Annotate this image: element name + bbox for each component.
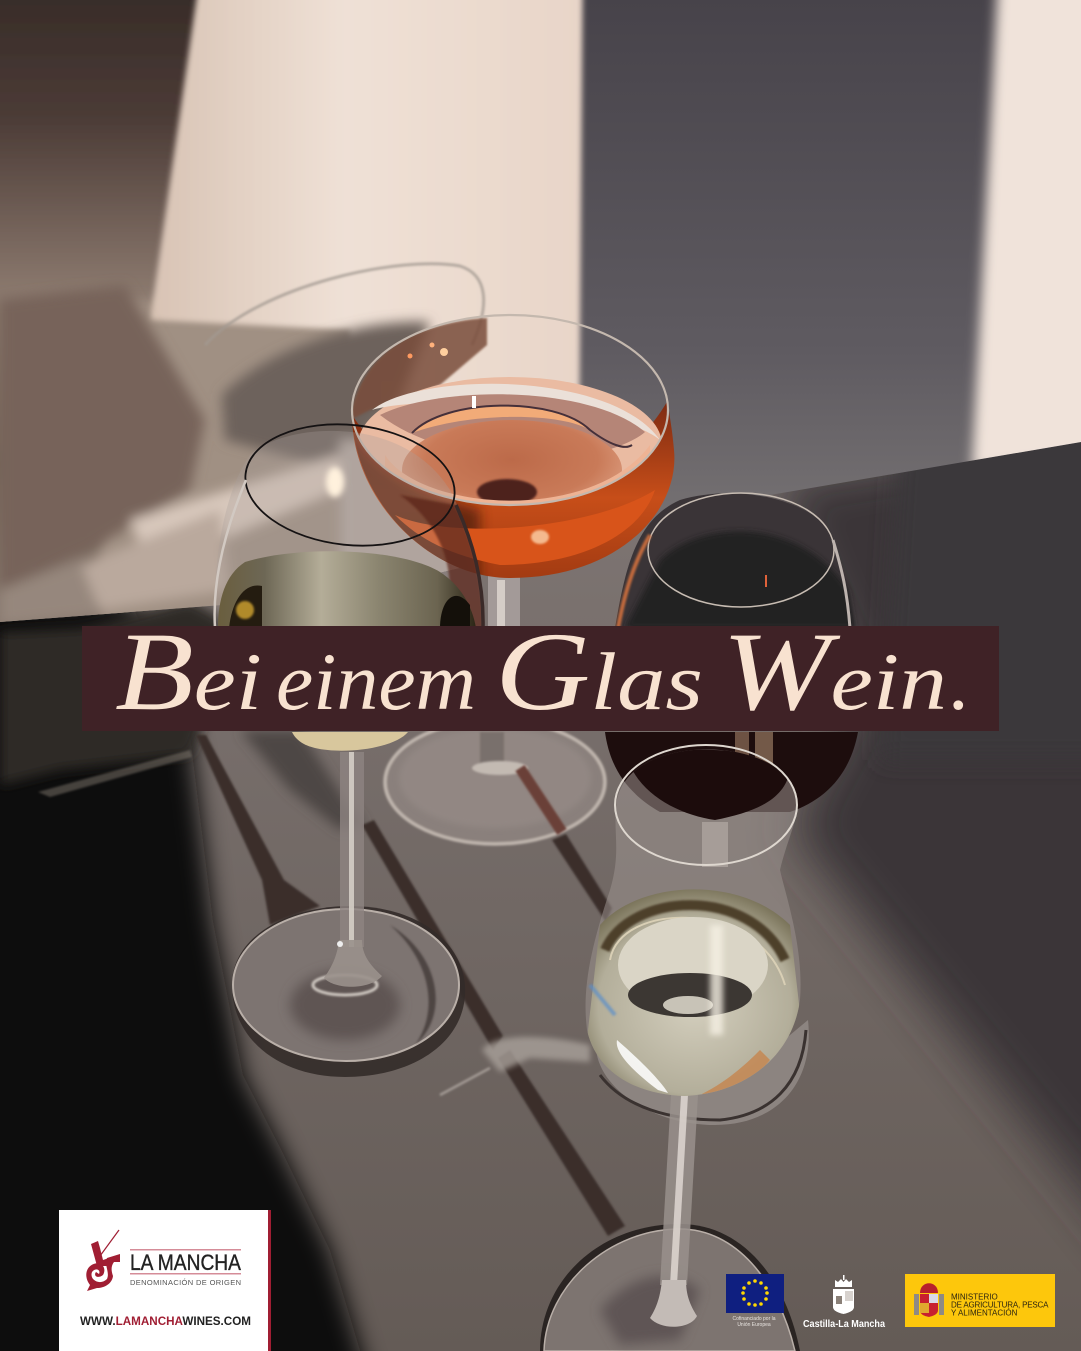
website: WWW.LAMANCHAWINES.COM [80,1316,251,1328]
foot and stem [385,575,605,844]
glass body [586,749,801,1096]
rim [352,315,668,505]
glass: white wine [215,414,483,1077]
wordmark: DENOMINACIÓN DE ORIGEN [130,1278,241,1287]
title text [115,610,970,734]
panel: La Mancha logo box [59,1210,271,1351]
shadow glass on wall [205,264,484,345]
logo: European Union: Unión Europea [737,1322,771,1328]
logo: Ministerio: MINISTERIO [951,1292,998,1302]
wall [0,0,1081,640]
logo: Ministerio [905,1274,1055,1327]
wine surface [359,377,661,472]
title text: einem [276,636,476,727]
rear foot [596,1020,809,1125]
bowl [215,431,483,628]
wordmark: LA MANCHA [130,1250,241,1275]
title text: . [950,636,970,727]
title text: Wein [722,610,947,734]
caustic light on table [440,1037,590,1095]
logo: Ministerio: DE AGRICULTURA, PESCA [951,1300,1049,1310]
logo: European Union: Cofinanciado por la [732,1316,776,1322]
glass: front small white wine [540,745,810,1351]
bowl bottom below banner [292,732,408,751]
red wine bowl lower part [605,732,858,812]
glass: rosé wine coupe [345,315,674,844]
title text: Glas [495,610,703,734]
icon: coat of arms [914,1283,944,1317]
front foot [540,1095,800,1351]
white wine [580,889,810,1100]
cast shadows of stems [196,735,625,1236]
logo: Castilla-La Mancha: Castilla-La Mancha [803,1319,885,1330]
bowl [352,400,674,578]
icon: La Mancha rider [86,1230,120,1291]
logo: Ministerio: Y ALIMENTACIÓN [951,1308,1018,1318]
logo: Castilla-La Mancha [803,1275,885,1330]
wordmark [130,1249,241,1287]
rim with red wine seen through it [628,750,790,820]
logo: European Union [726,1274,784,1328]
foot and stem [232,752,465,1077]
glass: red wine [605,493,858,812]
title banner [82,610,999,734]
title text: Bei [115,610,262,734]
